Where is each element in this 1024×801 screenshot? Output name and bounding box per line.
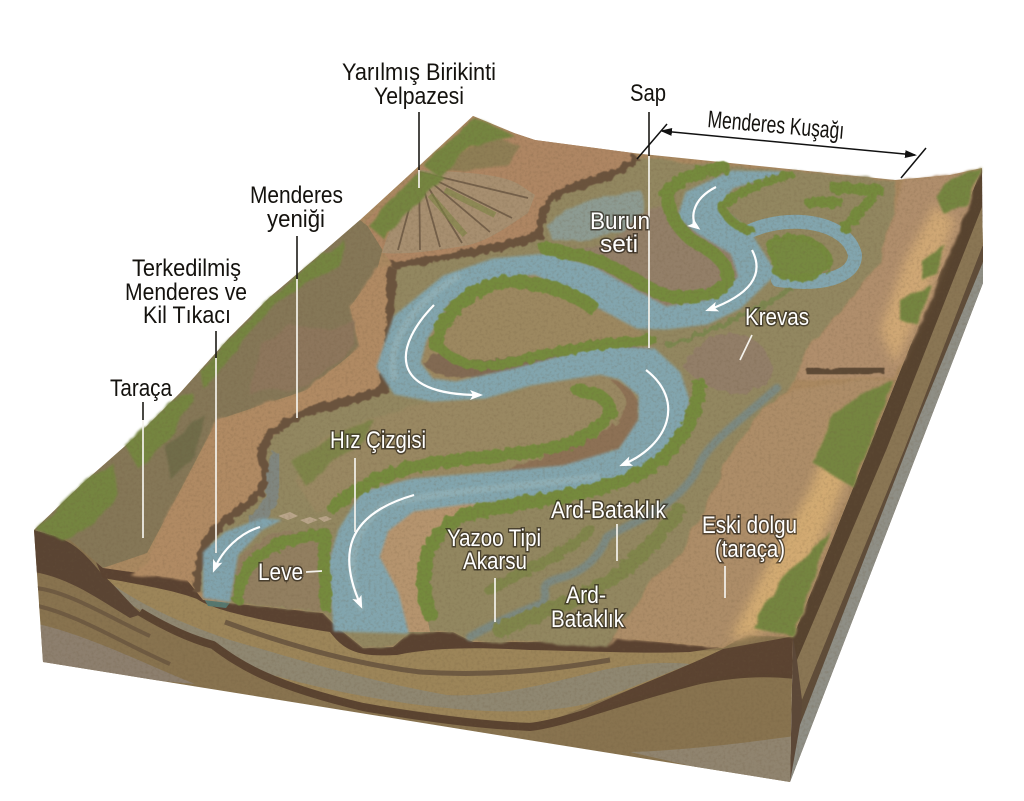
panel: riparian vegetation	[238, 168, 878, 630]
label: Ard-Bataklık lower: Bataklık	[551, 606, 625, 633]
flow arrows in the river	[214, 187, 757, 606]
escarpment upper	[392, 157, 637, 265]
label: Sap: Sap	[630, 80, 666, 107]
dark topsoil	[95, 560, 723, 655]
label: Menderes yeniği	[250, 182, 343, 418]
river highlights	[353, 275, 600, 610]
upper bar rim	[422, 340, 654, 377]
left water in cross-section	[204, 600, 230, 608]
label: Burun seti: seti	[600, 231, 638, 258]
upper right bluff	[796, 168, 982, 380]
left tan banding	[36, 588, 170, 664]
river channel	[330, 172, 855, 637]
bluff cliff shadow	[806, 368, 884, 374]
water in cross-section	[369, 647, 388, 648]
label: Burun seti: Burun	[590, 208, 650, 235]
lower point bar	[295, 373, 645, 512]
pale wetland near the bay	[547, 190, 644, 240]
label: Krevas	[740, 304, 809, 360]
label: Menderes yeniği: Menderes	[250, 182, 343, 209]
escarpment lower	[197, 268, 392, 592]
dark left wedge	[34, 530, 142, 618]
label: Terkedilmiş Menderes ve Kil Tıkacı: Terkedilmiş	[132, 255, 241, 282]
label: Terkedilmiş Menderes ve Kil Tıkacı: Menderes ve	[125, 279, 247, 306]
ridged olive slope	[34, 220, 385, 568]
label: Yarılmış Birikinti Yelpazesi: Yarılmış Birikinti	[342, 59, 496, 86]
lower sand bar	[378, 503, 480, 632]
left gray side channel	[250, 453, 278, 525]
side floodplain vegetation	[292, 420, 375, 485]
right terrace light sand	[730, 410, 850, 640]
label: Krevas: Krevas	[745, 304, 809, 331]
label: Menderes Kuşağı with dimension arrow: Menderes Kuşağı	[706, 106, 845, 145]
label: Terkedilmiş Menderes ve Kil Tıkacı	[125, 255, 247, 553]
lower point bar sand rim	[480, 380, 639, 478]
grain texture	[30, 110, 990, 790]
ridged slope hollows	[250, 320, 355, 395]
label: Yazoo Tipi Akarsu	[447, 525, 541, 622]
yazoo stream	[470, 388, 777, 637]
label: Taraça: Taraça	[110, 375, 173, 402]
panel: top terrain surface	[34, 116, 982, 648]
label: Eski dolgu (taraça): Eski dolgu	[702, 512, 797, 539]
label: Ard-Bataklık upper	[551, 497, 667, 561]
oxbow branch	[748, 222, 855, 282]
gravel bars	[278, 512, 332, 524]
label: Eski dolgu (taraça): (taraça)	[715, 536, 785, 563]
label: Eski dolgu (taraça)	[702, 512, 797, 598]
bedrock left	[38, 624, 195, 684]
right terrace	[607, 380, 893, 648]
label: Burun seti	[590, 208, 650, 258]
upper fan terrace	[365, 116, 637, 265]
upper right bluff light sand	[880, 205, 955, 365]
dark right wedge	[585, 637, 793, 710]
left river channel	[203, 518, 282, 602]
label: Yazoo Tipi Akarsu: Akarsu	[463, 548, 527, 575]
upper point bar	[419, 273, 654, 383]
label: Yarılmış Birikinti Yelpazesi: Yelpazesi	[374, 83, 464, 110]
label: Ard-Bataklık lower: Ard-	[566, 582, 606, 609]
panel: front cut face with sediment strata	[34, 530, 793, 782]
alluvial fan	[382, 170, 535, 253]
burun land	[560, 205, 740, 308]
panel: vegetation on slopes	[36, 117, 982, 637]
label: Ard-Bataklık lower	[551, 582, 625, 633]
slope hollow lower	[165, 415, 205, 480]
upper tan band	[103, 576, 723, 722]
panel: right cut face of the block	[790, 168, 983, 782]
krevas splay	[683, 333, 773, 393]
valley floor	[197, 157, 895, 648]
terrace: left bluff tan	[130, 262, 392, 585]
label: Menderes Kuşağı with dimension arrow	[637, 106, 926, 178]
label: Ard-Bataklık upper: Ard-Bataklık	[551, 497, 667, 524]
label: Leve: Leve	[258, 559, 303, 586]
label: Yazoo Tipi Akarsu: Yazoo Tipi	[447, 525, 541, 552]
label: Menderes yeniği: yeniği	[267, 206, 325, 233]
label: Hız Çizgisi	[330, 427, 426, 532]
leve island	[230, 528, 332, 612]
panel: point bars and islands	[203, 205, 740, 632]
gray sand layer	[110, 583, 690, 711]
bedrock right	[631, 736, 791, 782]
label: Terkedilmiş Menderes ve Kil Tıkacı: Kil Tıkacı	[143, 302, 231, 329]
label: Hız Çizgisi: Hız Çizgisi	[330, 427, 426, 454]
label: Yarılmış Birikinti Yelpazesi	[342, 59, 496, 188]
thin dark stripe	[225, 622, 610, 674]
dark seam	[140, 612, 795, 727]
olive terrace patch	[440, 135, 520, 170]
